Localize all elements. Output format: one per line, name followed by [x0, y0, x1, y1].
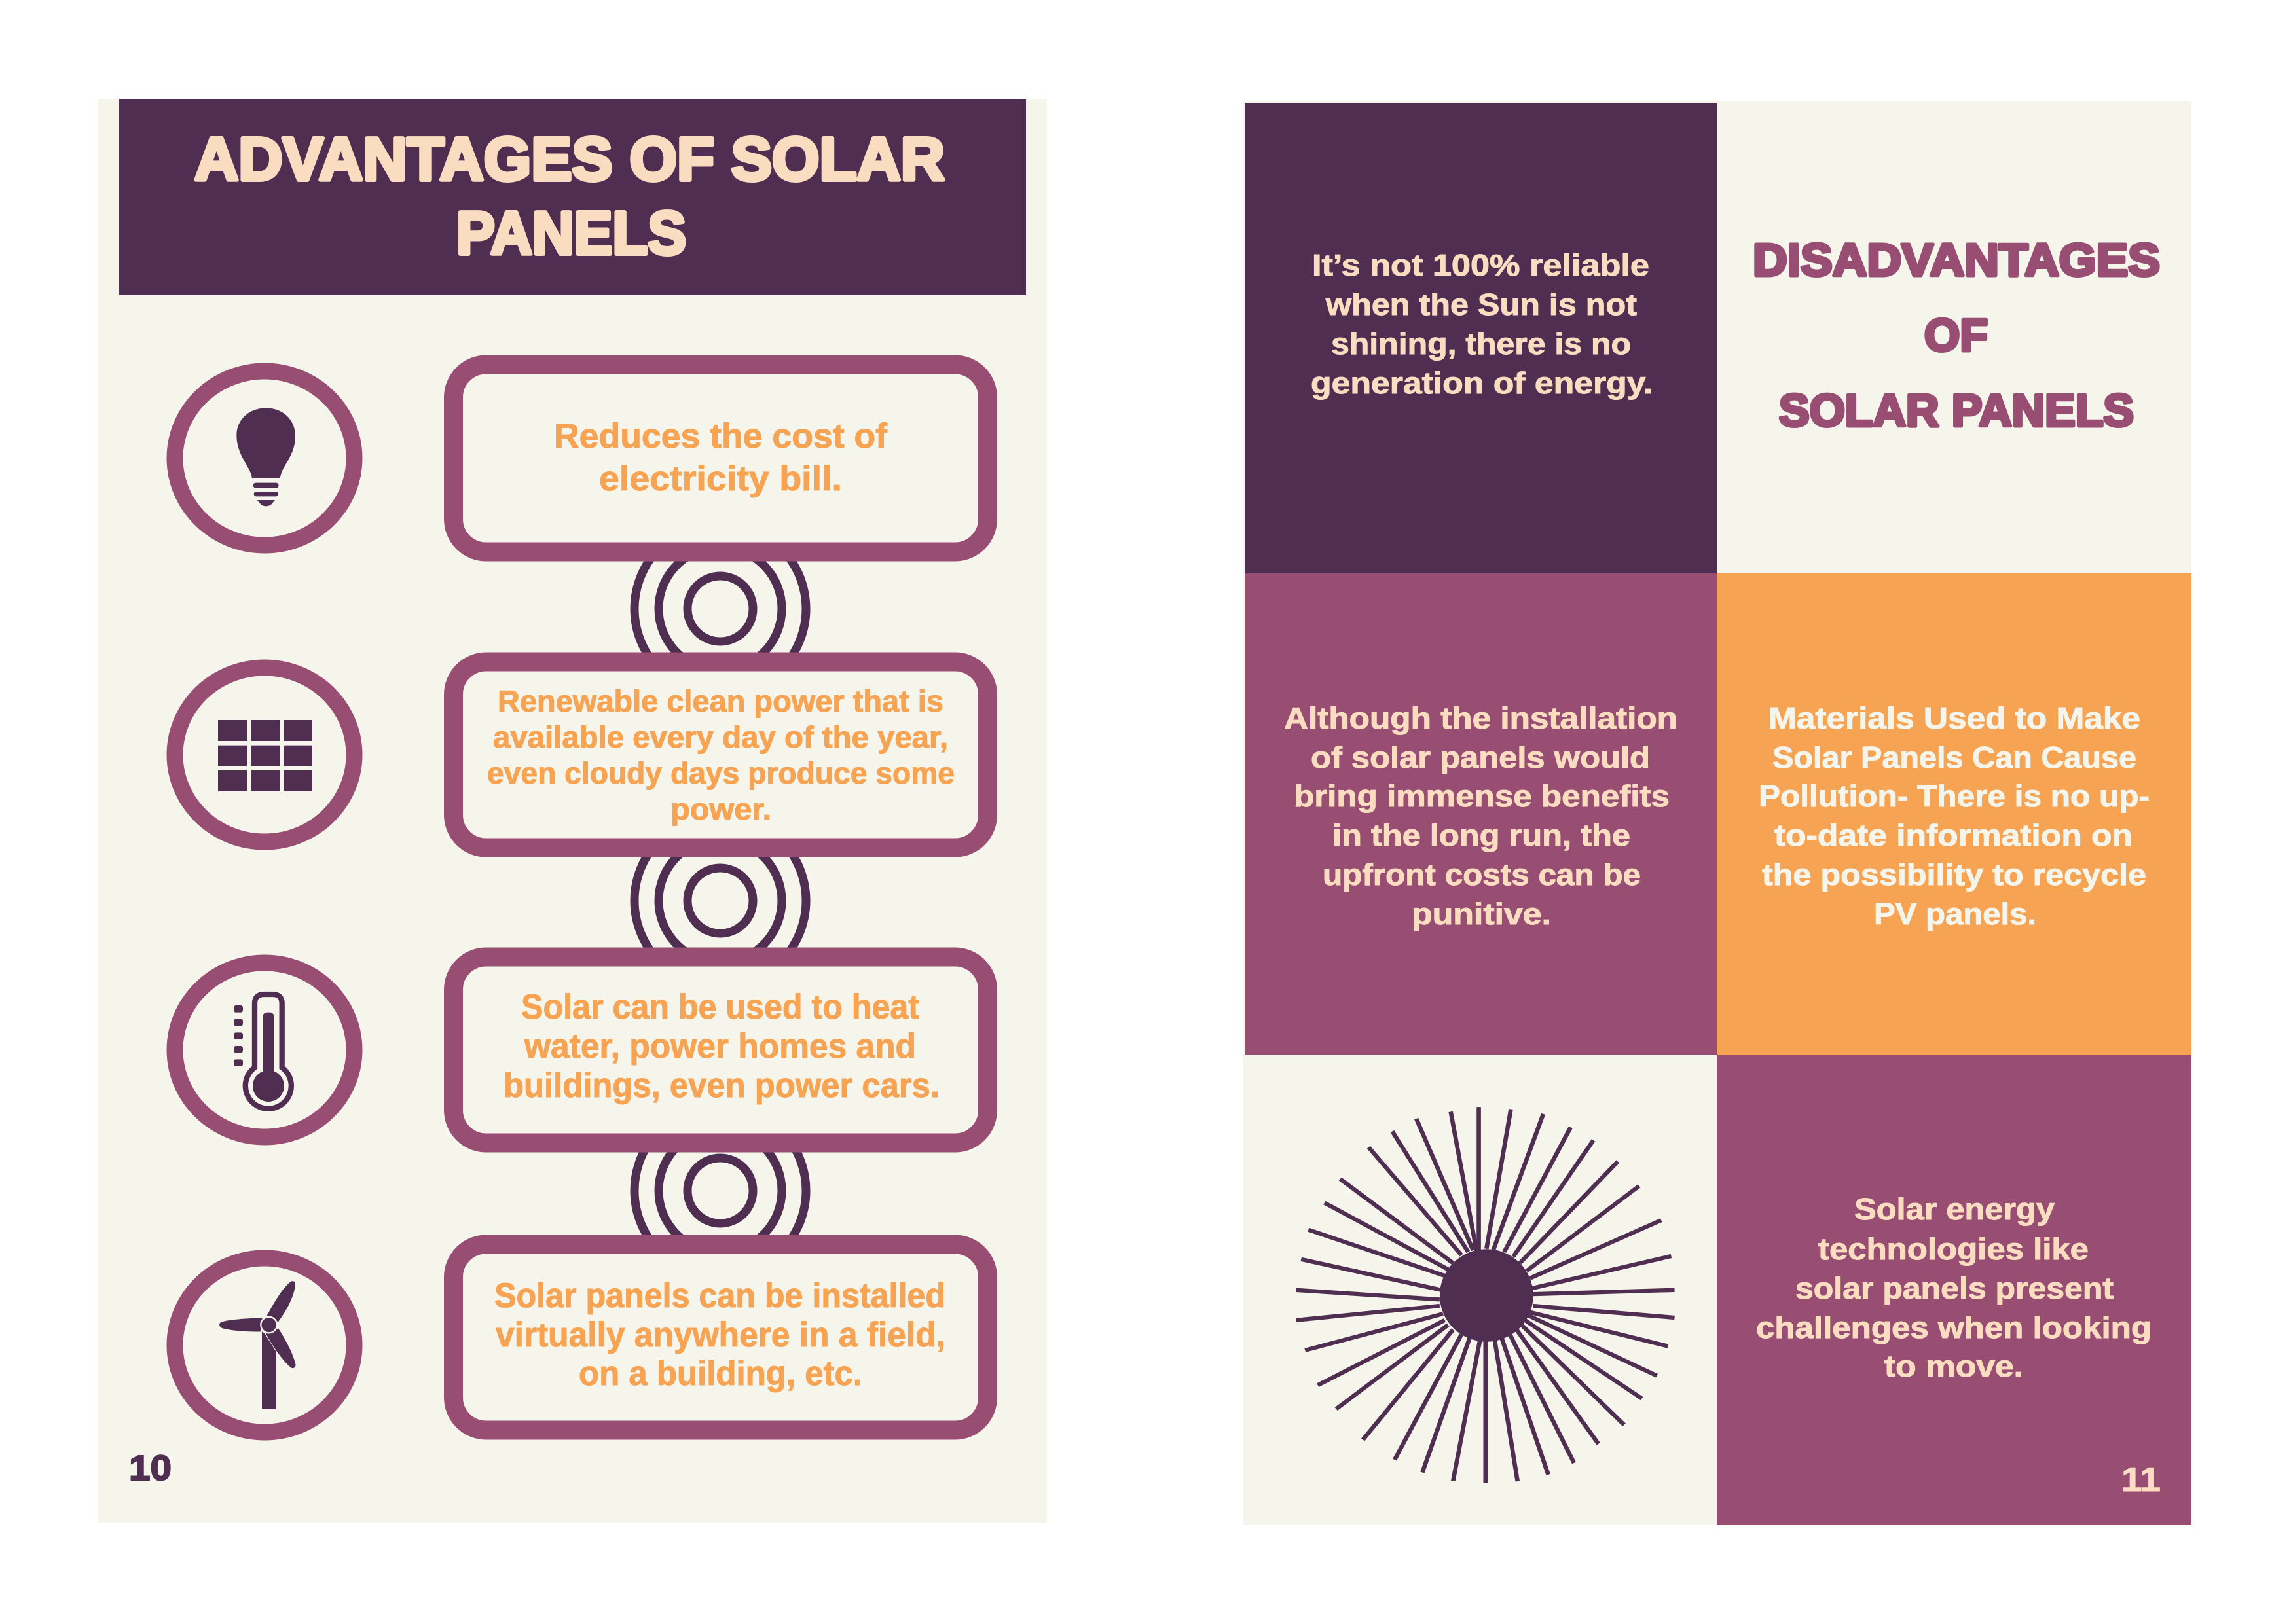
card: heat water: water, power homes and: [524, 1027, 916, 1066]
card: renewable clean power: available every day of the year,: [493, 720, 948, 754]
panel: pollution: Materials Used to Make: [1768, 701, 2140, 735]
card: renewable clean power: Renewable clean power that is: [498, 684, 943, 718]
panel: pollution: Pollution- There is no up-: [1759, 779, 2150, 813]
card: reduces cost: Reduces the cost of: [554, 417, 887, 456]
panel: hard to move: to move.: [1884, 1349, 2023, 1383]
card: installed anywhere: on a building, etc.: [579, 1354, 862, 1393]
concentric ring connector 2: [634, 815, 806, 986]
panel: upfront costs: bring immense benefits: [1294, 779, 1670, 813]
panel: not reliable: shining, there is no: [1331, 327, 1631, 361]
card: heat water: [453, 957, 987, 1143]
panel: hard to move: challenges when looking: [1756, 1310, 2152, 1344]
panel: upfront costs: of solar panels would: [1311, 740, 1650, 774]
card: installed anywhere: [453, 1244, 987, 1430]
heading: disadvantages: SOLAR PANELS: [1779, 385, 2134, 436]
heading: disadvantages: [1753, 234, 2160, 436]
panel: hard to move: Solar energy: [1854, 1192, 2055, 1226]
card: reduces cost: [453, 365, 987, 552]
panel: not reliable: when the Sun is not: [1325, 287, 1637, 321]
panel: hard to move: [1717, 1055, 2191, 1525]
card: heat water: Solar can be used to heat: [521, 988, 919, 1026]
card: renewable clean power: [453, 662, 987, 848]
heading: disadvantages: DISADVANTAGES: [1753, 234, 2160, 285]
panel: pollution: Solar Panels Can Cause: [1772, 740, 2136, 774]
panel: upfront costs: punitive.: [1412, 897, 1551, 931]
card: renewable clean power: power.: [670, 792, 771, 826]
card: heat water: buildings, even power cars.: [504, 1066, 940, 1105]
card: renewable clean power: even cloudy days produce some: [487, 756, 955, 790]
panel: pollution: the possibility to recycle: [1762, 857, 2146, 892]
panel: upfront costs: Although the installation: [1284, 701, 1677, 735]
panel: pollution: PV panels.: [1874, 897, 2036, 931]
panel: upfront costs: in the long run, the: [1332, 818, 1630, 852]
panel: not reliable: generation of energy.: [1311, 366, 1653, 400]
panel: pollution: [1717, 573, 2191, 1055]
card: installed anywhere: Solar panels can be installed: [494, 1276, 945, 1315]
page number 10: 10: [129, 1449, 172, 1488]
icon: sunburst: [1296, 1107, 1675, 1483]
page background right: [1243, 101, 2191, 1525]
panel: hard to move: technologies like: [1818, 1232, 2089, 1266]
icon: light bulb: [175, 371, 354, 545]
card: installed anywhere: virtually anywhere in a field,: [496, 1316, 945, 1354]
page 11: disadvantages: [1243, 101, 2191, 1525]
heading: disadvantages: OF: [1924, 310, 1988, 361]
icon: wind turbine: [175, 1258, 354, 1432]
concentric ring connector 3: [634, 1105, 806, 1276]
panel: upfront costs: [1245, 573, 1717, 1055]
icon: solar panel grid: [175, 668, 354, 842]
panel: hard to move: solar panels present: [1795, 1271, 2114, 1305]
card: reduces cost: electricity bill.: [599, 460, 842, 498]
panel: not reliable: [1245, 103, 1717, 573]
concentric ring connector 1: [634, 523, 806, 695]
page 10: advantages: [98, 99, 1047, 1523]
page background left: [98, 99, 1047, 1523]
panel: not reliable: It’s not 100% reliable: [1312, 248, 1649, 282]
icon: thermometer: [175, 963, 354, 1137]
title banner: [119, 99, 1026, 295]
title banner: ADVANTAGES OF SOLAR: [194, 125, 945, 193]
page number 11: 11: [2121, 1461, 2161, 1499]
panel: upfront costs: upfront costs can be: [1323, 857, 1641, 892]
panel: pollution: to-date information on: [1774, 818, 2133, 852]
title banner: PANELS: [456, 199, 686, 267]
